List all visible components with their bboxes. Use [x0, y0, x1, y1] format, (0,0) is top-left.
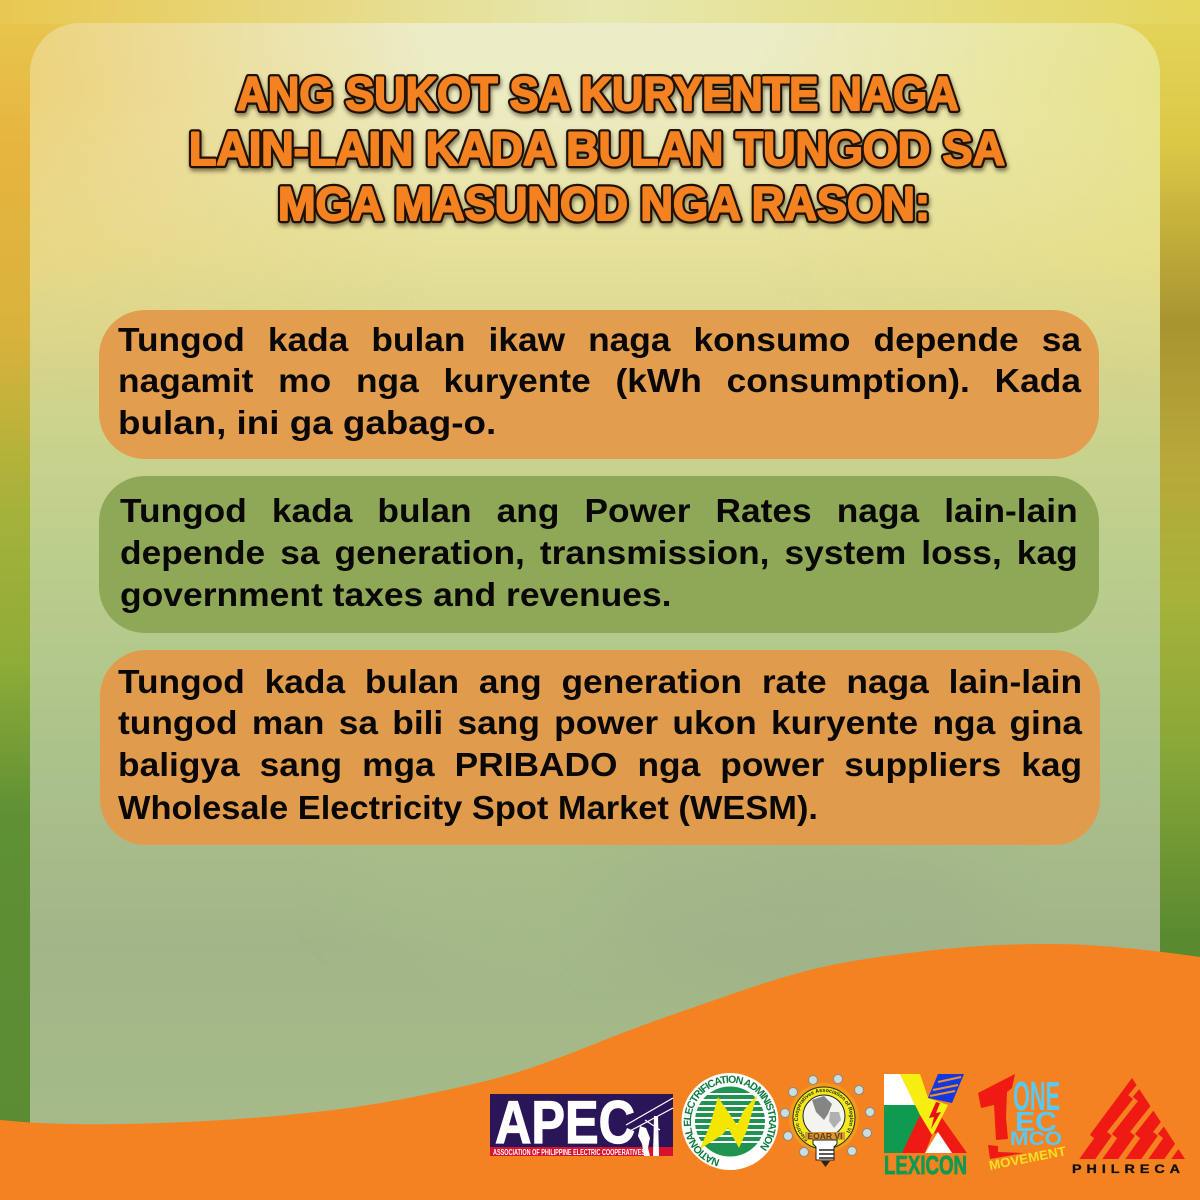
text: reason 3: Wholesale Electricity Spot Market (WESM).: [118, 789, 818, 826]
text: reason 2: government taxes and revenues.: [120, 576, 672, 613]
logo: EOAR VI light bulb: EOAR VI: [808, 1131, 842, 1141]
logo: APEC: ASSOCIATION OF PHILIPPINE ELECTRIC COOPERATIVES: [493, 1148, 645, 1157]
panel: reason 2 power rates: [99, 476, 1099, 633]
panel: reason 3 generation rate: [100, 650, 1100, 845]
logo: APEC: APEC: [495, 1089, 635, 1156]
text: reason 1: [118, 321, 1082, 441]
text: reason 3: tungod man sa bili sang power ukon kuryente nga gina: [118, 704, 1082, 741]
title: ANG SUKOT SA KURYENTE NAGA: [236, 67, 958, 120]
title: LAIN-LAIN KADA BULAN TUNGOD SA: [189, 122, 1005, 175]
text: reason 1: Tungod kada bulan ikaw naga konsumo depende sa: [118, 321, 1081, 358]
logo: One EC MCO Movement: [978, 1073, 1067, 1173]
logo: One EC MCO Movement: MOVEMENT: [988, 1143, 1067, 1173]
text: reason 2: depende sa generation, transmission, system loss, kag: [120, 534, 1078, 571]
logo: One EC MCO Movement: MCO: [1010, 1129, 1062, 1150]
title: ANG SUKOT SA KURYENTE NAGA: [236, 67, 958, 120]
text: reason 1: nagamit mo nga kuryente (kWh consumption). Kada: [118, 362, 1081, 399]
text: reason 3: Tungod kada bulan ang generation rate naga lain-lain: [118, 663, 1082, 700]
text: reason 1: bulan, ini ga gabag-o.: [118, 404, 496, 441]
logo: One EC MCO Movement: EC: [1015, 1106, 1057, 1137]
panel: reason 1 kWh consumption: [99, 310, 1099, 459]
text: reason 2: [120, 492, 1078, 613]
text: reason 2: Tungod kada bulan ang Power Rates naga lain-lain: [120, 492, 1078, 529]
logo: EOAR VI light bulb: Electric Cooperatives Association of Region VI: [794, 1089, 854, 1142]
logo: EOAR VI light bulb: [780, 1074, 875, 1167]
text: reason 3: baligya sang mga PRIBADO nga power suppliers kag: [118, 746, 1082, 783]
logo: Lexicon: [884, 1074, 967, 1180]
text: reason 3: [118, 663, 1082, 826]
logo: One EC MCO Movement: ONE: [1013, 1073, 1060, 1119]
title: LAIN-LAIN KADA BULAN TUNGOD SA: [189, 122, 1005, 175]
title: MGA MASUNOD NGA RASON:: [278, 177, 930, 230]
logo: Philreca: PHILRECA: [1072, 1164, 1185, 1176]
title: MGA MASUNOD NGA RASON:: [278, 177, 930, 230]
logo: Lexicon: LEXICON: [884, 1150, 967, 1180]
orange wave footer: [0, 944, 1200, 1200]
logo: National Electrification Administration: NATIONAL ELECTRIFICATION ADMINISTRATION: [684, 1076, 776, 1166]
logo: Philreca: [1072, 1078, 1185, 1174]
